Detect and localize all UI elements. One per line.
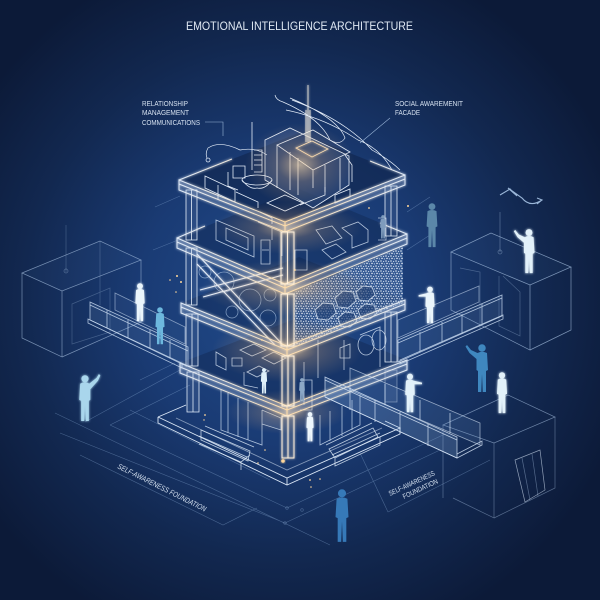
curved arrow annotation bbox=[500, 188, 542, 204]
label: self-awareness foundation right: SELF-AWARENESS bbox=[388, 470, 436, 498]
speckled social awareness facade bbox=[294, 247, 403, 347]
ground floor with doors bbox=[199, 390, 380, 470]
floor plates (interior) bbox=[177, 133, 407, 406]
label: relationship management: MANAGEMENT bbox=[142, 110, 190, 117]
left bridge bbox=[88, 293, 188, 368]
floor slab 3 bbox=[181, 300, 405, 356]
person: white on lower bridge bbox=[405, 374, 422, 412]
left annex box bbox=[22, 225, 141, 357]
person: white standing right bbox=[497, 372, 507, 413]
plinth base bbox=[158, 404, 400, 485]
right annex box bbox=[451, 212, 571, 350]
label: self-awareness foundation right bbox=[388, 470, 439, 501]
ground plan lines bbox=[55, 196, 490, 545]
person: third floor bbox=[261, 368, 267, 393]
roof equipment and pavilion bbox=[205, 85, 400, 224]
label: self-awareness foundation right: FOUNDATION bbox=[402, 478, 439, 501]
stairs left bbox=[199, 426, 254, 470]
small equipment bbox=[205, 166, 350, 224]
person: entrance bbox=[306, 412, 314, 441]
antenna bbox=[306, 85, 310, 142]
label: social awareness facade bbox=[360, 101, 464, 143]
person: foreground blue bbox=[336, 489, 348, 542]
label: relationship management: COMMUNICATIONS bbox=[142, 120, 200, 127]
diagonal cross bracing with gears bbox=[197, 254, 283, 345]
right upper bridge bbox=[398, 286, 503, 364]
front corner column bbox=[281, 232, 294, 458]
floor slab 2 bbox=[177, 223, 407, 294]
label: relationship management bbox=[142, 101, 223, 136]
golden glow core bbox=[202, 123, 372, 434]
golden sparks bbox=[169, 205, 409, 488]
label: social awareness facade: SOCIAL AWAREMENIT bbox=[395, 101, 464, 108]
ground-floor left column bbox=[187, 372, 199, 412]
person: second floor dim bbox=[380, 215, 386, 239]
person: left bridge white bbox=[135, 283, 145, 321]
right columns bbox=[385, 186, 397, 402]
left columns bbox=[186, 190, 198, 366]
right lower glass bridge bbox=[325, 368, 482, 458]
roof slab bbox=[179, 159, 405, 232]
third floor furniture bbox=[216, 327, 386, 410]
stairs right bbox=[326, 423, 380, 466]
label: relationship management: RELATIONSHIP bbox=[142, 101, 188, 108]
person: blue gesturing bbox=[466, 344, 488, 392]
radio mast and dish bbox=[252, 122, 262, 172]
title: EMOTIONAL INTELLIGENCE ARCHITECTURE bbox=[186, 19, 413, 33]
person: right bridge bbox=[419, 287, 435, 323]
person: left bridge blue bbox=[155, 307, 165, 344]
lower right annex box bbox=[443, 395, 555, 518]
second floor furniture bbox=[216, 218, 386, 270]
label: social awareness facade: FACADE bbox=[395, 110, 420, 117]
label: self-awareness foundation left: SELF-AWARENESS FOUNDATION bbox=[116, 462, 208, 514]
cables bbox=[206, 95, 400, 170]
person: upper right dim bbox=[427, 203, 437, 247]
floor slab 4 bbox=[180, 360, 407, 416]
person: third floor dim bbox=[299, 378, 305, 402]
person: lower left waving bbox=[79, 374, 100, 421]
person: on right box bbox=[514, 229, 535, 273]
